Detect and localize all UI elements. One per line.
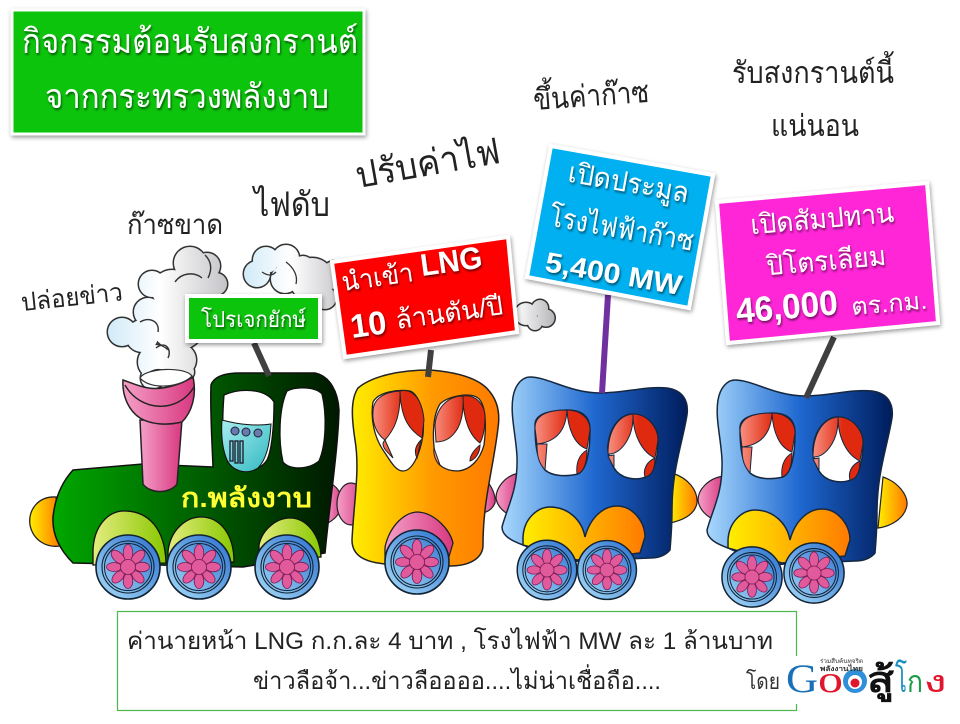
label: ปล่อยข่าว: ปล่อยข่าว xyxy=(20,278,124,317)
label: รับสงกรานต์นี้ แน่นอน xyxy=(732,51,894,143)
sign: นำเข้า LNG: 10 xyxy=(348,303,389,345)
wheel arches xyxy=(93,511,166,565)
car 3 blue xyxy=(707,380,892,607)
sign: เปิดสัมปทาน: เปิดสัมปทาน xyxy=(749,198,895,240)
cloud: large left xyxy=(108,247,227,390)
car 2 blue xyxy=(502,377,687,600)
loco body xyxy=(53,373,339,567)
label: รับสงกรานต์นี้ แน่นอน: รับสงกรานต์นี้ xyxy=(732,51,894,90)
logo: Goo สู้โกง: พลังงานไทย xyxy=(820,664,863,673)
logo: Goo สู้โกง: ก xyxy=(907,666,923,699)
sign: เปิดสัมปทาน xyxy=(717,183,938,343)
cab window left xyxy=(223,390,274,471)
sign: เปิดประมูล: โรงไฟฟ้าก๊าซ xyxy=(547,200,696,257)
logo: Goo สู้โกง: ง xyxy=(923,666,947,699)
label: ขึ้นค่าก๊าซ: ขึ้นค่าก๊าซ xyxy=(532,70,650,117)
car 1 orange xyxy=(352,370,499,594)
label: ปรับค่าไฟ: ปรับค่าไฟ xyxy=(352,130,503,196)
logo: Goo สู้โกง: G xyxy=(786,656,818,701)
buffer xyxy=(30,497,60,546)
sign: โปรเจกยักษ์ xyxy=(187,296,320,341)
loco label: ก.พลังงาบ xyxy=(181,483,312,513)
cloud: small right xyxy=(515,300,554,330)
locomotive xyxy=(30,369,365,599)
logo: Goo สู้โกง: โ xyxy=(895,659,907,700)
cloud: middle xyxy=(244,245,349,309)
sign: เปิดประมูล: เปิดประมูล xyxy=(566,157,691,210)
logo: Goo สู้โกง: ร่วมสืบค้นทุจริต xyxy=(820,657,863,665)
cab window right xyxy=(280,388,325,468)
logo: Goo สู้โกง xyxy=(742,656,952,704)
sign: นำเข้า LNG: ล้านตัน/ปี xyxy=(394,290,505,335)
sign: นำเข้า LNG xyxy=(332,237,517,357)
title banner: กิจกรรมต้อนรับสงกรานต์ xyxy=(22,23,358,61)
couplings car 3 xyxy=(698,476,907,528)
label: ไฟดับ: ไฟดับ xyxy=(251,185,330,224)
title banner: จากกระทรวงพลังงาบ xyxy=(45,78,329,116)
wheels xyxy=(96,535,160,599)
sign: เปิดประมูล xyxy=(527,146,713,308)
coupling xyxy=(326,483,365,525)
bottom note box: ข่าวลือจ้า...ข่าวลืออออ....ไม่น่าเชื่อถือ.... xyxy=(253,664,661,695)
sign: นำเข้า LNG: นำเข้า xyxy=(340,257,415,297)
title banner xyxy=(12,10,364,134)
coupling 1-2 xyxy=(480,473,520,516)
logo: Goo สู้โกง: โดย xyxy=(746,669,780,694)
sign: เปิดสัมปทาน: ตร.กม. xyxy=(850,287,928,321)
bottom note box: ค่านายหน้า LNG ก.ก.ละ 4 บาท , โรงไฟฟ้า MW ละ 1 ล้านบาท xyxy=(127,627,773,655)
logo: Goo สู้โกง: o xyxy=(818,659,843,701)
sign: นำเข้า LNG: LNG xyxy=(418,240,484,283)
label: ก๊าซขาด: ก๊าซขาด xyxy=(127,209,223,240)
sign: โปรเจกยักษ์: โปรเจกยักษ์ xyxy=(201,307,306,332)
nub car 2 xyxy=(670,473,697,523)
sign poles xyxy=(254,295,834,398)
chimney xyxy=(123,369,194,492)
logo: Goo สู้โกง: สู้ xyxy=(867,659,894,703)
sign: เปิดสัมปทาน: ปิโตรเลียม xyxy=(765,241,887,281)
sign: เปิดประมูล: 5,400 MW xyxy=(543,246,685,301)
sign: เปิดสัมปทาน: 46,000 xyxy=(734,283,839,331)
bottom note box xyxy=(118,612,796,710)
floating labels xyxy=(20,51,894,317)
smoke clouds xyxy=(108,245,554,390)
label: รับสงกรานต์นี้ แน่นอน: แน่นอน xyxy=(771,110,859,143)
